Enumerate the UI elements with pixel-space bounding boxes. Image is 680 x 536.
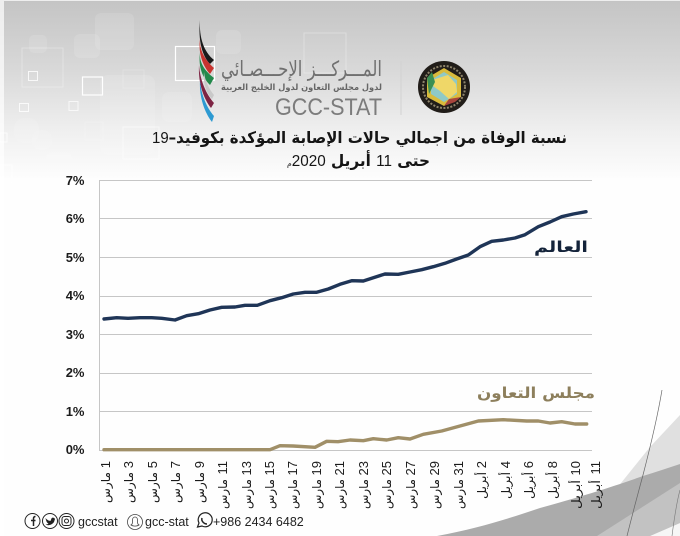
x axis labels: 5 — [145, 461, 160, 468]
icon: snapchat — [128, 514, 142, 530]
x axis labels: أبريل — [568, 480, 584, 509]
title — [152, 128, 567, 170]
x axis labels: مارس — [380, 479, 395, 509]
x axis labels: 9 — [192, 461, 207, 468]
icon: facebook — [25, 514, 40, 528]
x axis labels: مارس — [216, 479, 231, 509]
x axis labels: 29 — [427, 461, 442, 475]
y axis labels: 3% — [66, 327, 85, 342]
x axis labels: مارس — [452, 479, 467, 509]
x axis labels: مارس — [404, 479, 419, 509]
title: حتى 11 أبريل 2020م — [287, 150, 430, 170]
x axis labels: أبريل — [521, 472, 537, 499]
x axis labels: مارس — [333, 479, 348, 509]
icon: whatsapp — [198, 513, 212, 527]
x axis labels: 10 — [568, 461, 583, 475]
x axis labels: مارس — [193, 472, 208, 503]
y axis labels: 7% — [66, 173, 85, 188]
x axis labels: 15 — [262, 461, 277, 475]
logo: GCC-STAT — [199, 20, 470, 122]
x axis labels: مارس — [169, 472, 184, 503]
y axis labels — [66, 173, 85, 457]
x axis labels: مارس — [310, 479, 325, 509]
GCC series line — [104, 420, 587, 450]
y axis labels: 2% — [66, 365, 85, 380]
logo subtitle: لدول مجلس التعاون لدول الخليج العربية — [221, 83, 382, 93]
x axis labels: 8 — [545, 461, 560, 468]
label: world: العالم — [534, 238, 588, 256]
y axis labels: 5% — [66, 250, 85, 265]
x axis labels: 1 — [98, 461, 113, 468]
x axis labels — [98, 461, 604, 509]
x axis labels: مارس — [357, 479, 372, 509]
title: نسبة الوفاة من اجمالي حالات الإصابة المؤكدة بكوفيد–19 — [152, 128, 567, 148]
y axis labels: 1% — [66, 404, 85, 419]
x axis labels: 13 — [239, 461, 254, 475]
x axis labels: أبريل — [474, 472, 490, 499]
y axis labels: 6% — [66, 211, 85, 226]
text: phone: +986 2434 6482 — [213, 515, 304, 529]
x axis labels: 7 — [168, 461, 183, 468]
x axis labels: مارس — [99, 472, 114, 503]
x axis labels: 31 — [451, 461, 466, 475]
icon: twitter — [42, 514, 58, 528]
icon: GCC emblem — [418, 61, 470, 113]
x axis labels: 11 — [215, 461, 230, 474]
world series line — [104, 212, 586, 320]
label: GCC: مجلس التعاون — [477, 384, 595, 402]
x axis labels: مارس — [240, 479, 255, 509]
x axis labels: 11 — [588, 461, 603, 474]
x axis labels: مارس — [146, 472, 161, 503]
line chart — [66, 173, 604, 509]
x axis labels: مارس — [428, 479, 443, 509]
x axis labels: أبريل — [545, 472, 561, 499]
logo wordmark: GCC-STAT — [275, 94, 382, 121]
x axis labels: مارس — [263, 479, 278, 509]
text: gcc-stat: gcc-stat — [145, 515, 189, 529]
x axis labels: 27 — [403, 461, 418, 475]
y axis labels: 0% — [66, 442, 85, 457]
x axis labels: 25 — [379, 461, 394, 475]
logo title: المـــركـــز الإحـــصـائي — [221, 57, 382, 81]
x axis labels: 2 — [474, 461, 489, 468]
x axis labels: 23 — [356, 461, 371, 475]
icon: instagram — [59, 514, 74, 528]
x axis labels: مارس — [122, 472, 137, 503]
x axis labels: 6 — [521, 461, 536, 468]
x axis labels: 19 — [309, 461, 324, 475]
x axis labels: أبريل — [498, 472, 514, 499]
icon: ribbons — [199, 20, 214, 122]
x axis labels: 4 — [498, 461, 513, 468]
x axis labels: 21 — [332, 461, 347, 475]
x axis labels: 3 — [121, 461, 136, 468]
x axis labels: مارس — [286, 479, 301, 509]
x axis labels: أبريل — [588, 480, 604, 509]
text: gccstat: gccstat — [78, 515, 118, 529]
bottom-right decorative swoosh — [437, 390, 680, 536]
x axis labels: 17 — [285, 461, 300, 475]
footer social contacts — [25, 513, 304, 530]
y axis labels: 4% — [66, 288, 85, 303]
